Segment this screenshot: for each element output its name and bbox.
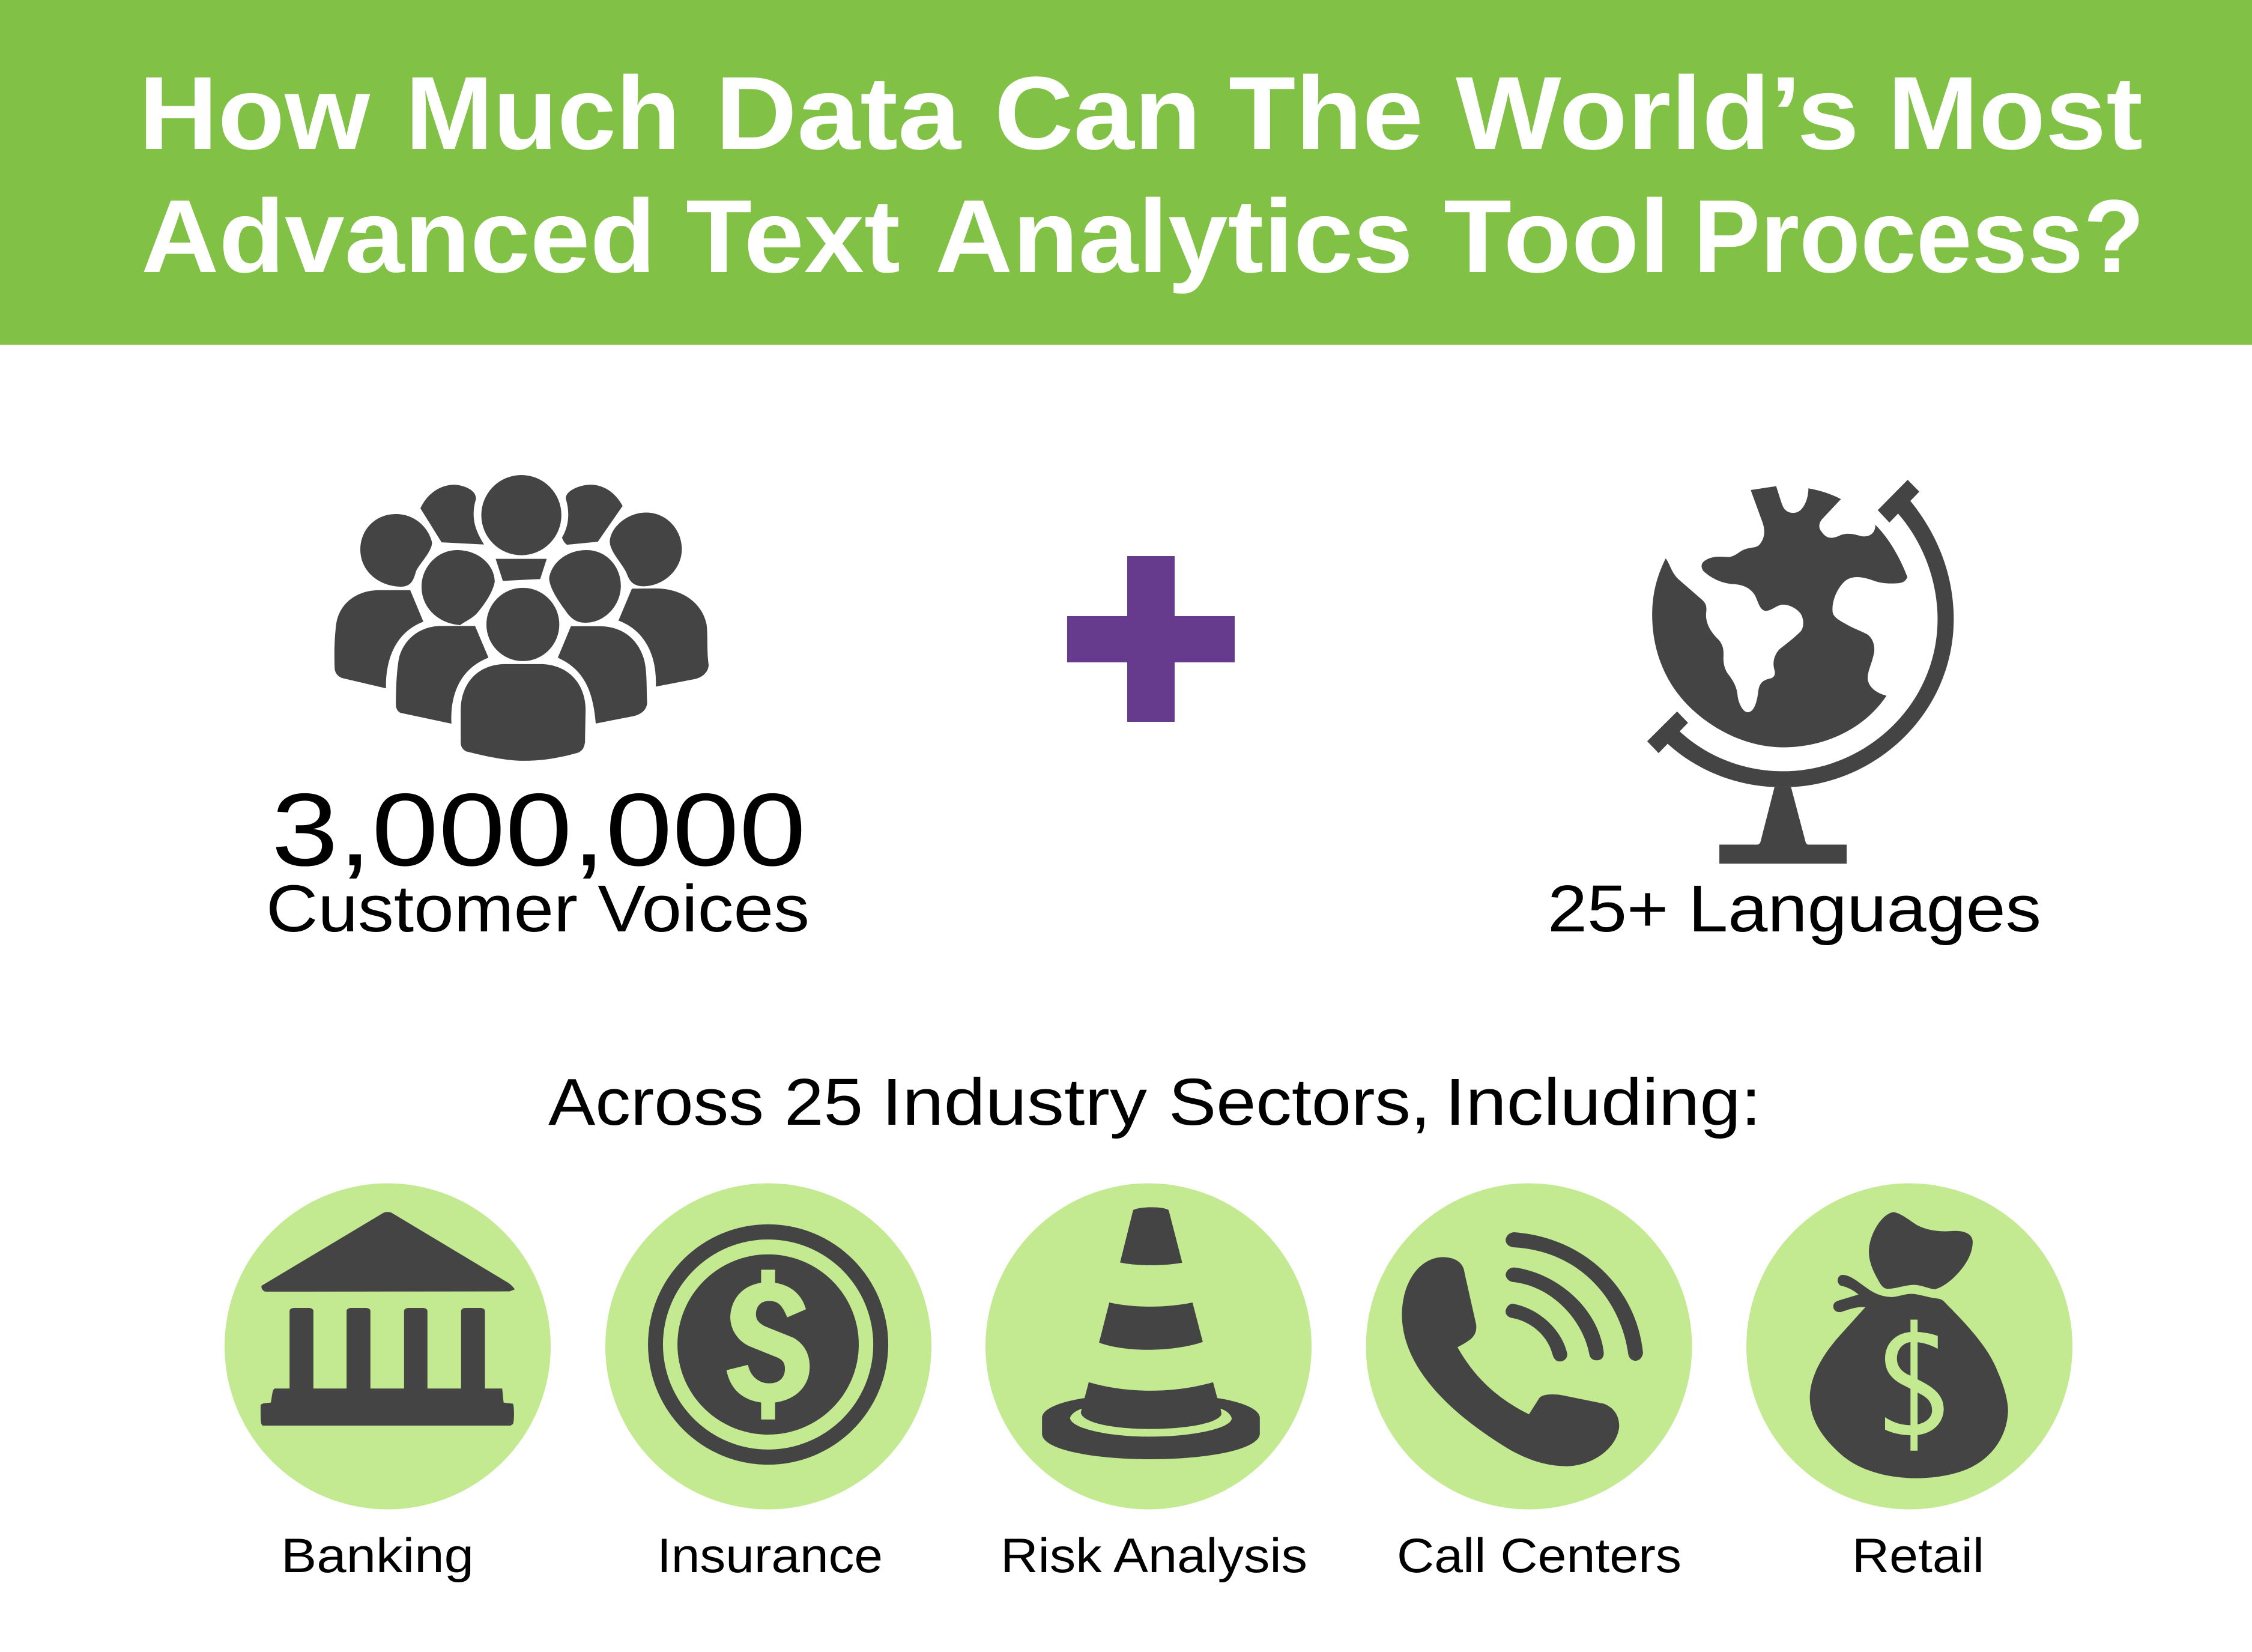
title: Data xyxy=(715,55,962,171)
icon: money bag xyxy=(1810,1212,2008,1478)
title: Process? xyxy=(1694,178,2145,294)
heading: industry sectors xyxy=(548,1065,1761,1139)
panel: customer voices xyxy=(266,475,810,946)
label: banking: Banking xyxy=(281,1529,474,1583)
heading: industry sectors: Including: xyxy=(1445,1065,1761,1139)
title: Tool xyxy=(1444,178,1670,294)
panel: retail xyxy=(1746,1183,2072,1583)
header banner xyxy=(0,0,2252,345)
icon background: retail xyxy=(1746,1183,2072,1510)
icon: traffic cone xyxy=(1042,1207,1260,1459)
heading: industry sectors: Across xyxy=(548,1065,764,1139)
icon background: insurance xyxy=(605,1183,931,1510)
panel: call centers xyxy=(1366,1183,1692,1583)
icon: globe xyxy=(1647,480,1954,864)
icon background: risk analysis xyxy=(985,1183,1312,1510)
icon: purple plus xyxy=(1067,556,1235,722)
label: customer voices: Customer Voices xyxy=(266,872,810,946)
banner background xyxy=(0,0,2252,345)
heading: industry sectors: Industry xyxy=(882,1065,1147,1139)
icon: bank building xyxy=(261,1212,515,1426)
title: How xyxy=(139,55,370,171)
title: Analytics xyxy=(935,178,1413,294)
stat: 3,000,000: 3,000,000 xyxy=(271,772,806,888)
title: Can xyxy=(994,55,1201,171)
panel: risk analysis xyxy=(985,1183,1312,1583)
title: The xyxy=(1229,55,1423,171)
panel: banking xyxy=(225,1183,551,1583)
label: call centers: Call Centers xyxy=(1397,1529,1681,1583)
label: risk analysis: Risk Analysis xyxy=(1000,1529,1307,1583)
title: Advanced xyxy=(141,178,656,294)
icon background: banking xyxy=(225,1183,551,1510)
icon: crowd of people xyxy=(334,475,709,761)
title: Most xyxy=(1887,55,2143,171)
heading: industry sectors: Sectors, xyxy=(1169,1065,1430,1139)
label: retail: Retail xyxy=(1852,1529,1984,1583)
title: World’s xyxy=(1456,55,1859,171)
label: insurance: Insurance xyxy=(657,1529,883,1583)
icon background: call centers xyxy=(1366,1183,1692,1510)
icon: dollar coin xyxy=(648,1224,888,1465)
panel: insurance xyxy=(605,1183,931,1583)
label: languages: 25+ Languages xyxy=(1548,872,2041,946)
panel: languages xyxy=(1548,480,2041,946)
title xyxy=(139,55,2145,294)
heading: industry sectors: 25 xyxy=(784,1065,863,1139)
title: Much xyxy=(405,55,680,171)
icon: telephone handset xyxy=(1402,1232,1643,1466)
title: Text xyxy=(686,178,900,294)
